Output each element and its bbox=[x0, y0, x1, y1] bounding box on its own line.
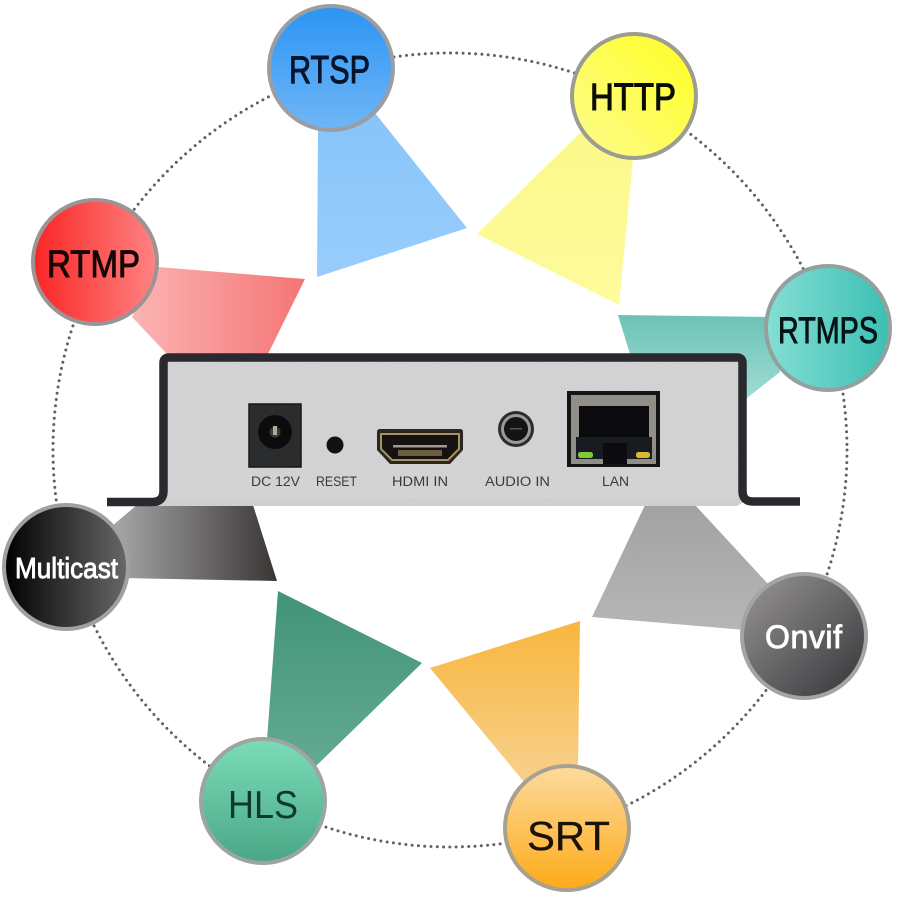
label: AUDIO IN: AUDIO IN bbox=[485, 474, 550, 489]
node: HTTP bbox=[572, 34, 696, 158]
label: DC 12V: DC 12V bbox=[251, 474, 300, 489]
beam: Multicast bbox=[112, 505, 277, 581]
node: Onvif: Onvif bbox=[765, 619, 842, 655]
node: RTSP bbox=[269, 6, 393, 130]
beam: RTMPS bbox=[618, 315, 780, 400]
LED: green bbox=[578, 452, 593, 458]
node: SRT: SRT bbox=[527, 813, 610, 859]
node: Multicast: Multicast bbox=[15, 553, 118, 585]
port: LAN RJ45 bbox=[567, 391, 660, 467]
beam: SRT bbox=[430, 621, 580, 782]
node: RTMP: RTMP bbox=[47, 244, 140, 286]
beam: HLS bbox=[267, 591, 422, 766]
device frame and mounting flanges bbox=[107, 358, 800, 502]
node: SRT bbox=[505, 766, 629, 890]
port: reset button bbox=[326, 436, 344, 454]
beam: RTSP bbox=[317, 113, 467, 277]
device: encoder rear panel bbox=[107, 358, 800, 506]
node: HLS bbox=[201, 739, 325, 863]
beam: Onvif bbox=[592, 505, 770, 630]
node: RTMP bbox=[33, 200, 157, 324]
beam: RTMP bbox=[132, 267, 305, 354]
node: RTSP: RTSP bbox=[289, 49, 370, 92]
device faceplate bbox=[166, 360, 739, 498]
label: HDMI IN: HDMI IN bbox=[392, 474, 448, 489]
node: HTTP: HTTP bbox=[590, 77, 676, 119]
node: RTMPS bbox=[766, 266, 890, 390]
node: HLS: HLS bbox=[228, 784, 298, 827]
device lower lip bbox=[158, 497, 747, 506]
port: audio jack bbox=[498, 411, 534, 447]
node: Onvif bbox=[742, 574, 866, 698]
beam: HTTP bbox=[477, 133, 633, 305]
label: RESET: RESET bbox=[316, 474, 357, 489]
LED: yellow bbox=[636, 452, 650, 458]
label: LAN: LAN bbox=[602, 474, 629, 489]
port: HDMI bbox=[377, 429, 463, 464]
port: DC 12V jack bbox=[249, 404, 301, 467]
node: Multicast bbox=[4, 505, 128, 629]
dotted connection ring bbox=[53, 53, 847, 847]
